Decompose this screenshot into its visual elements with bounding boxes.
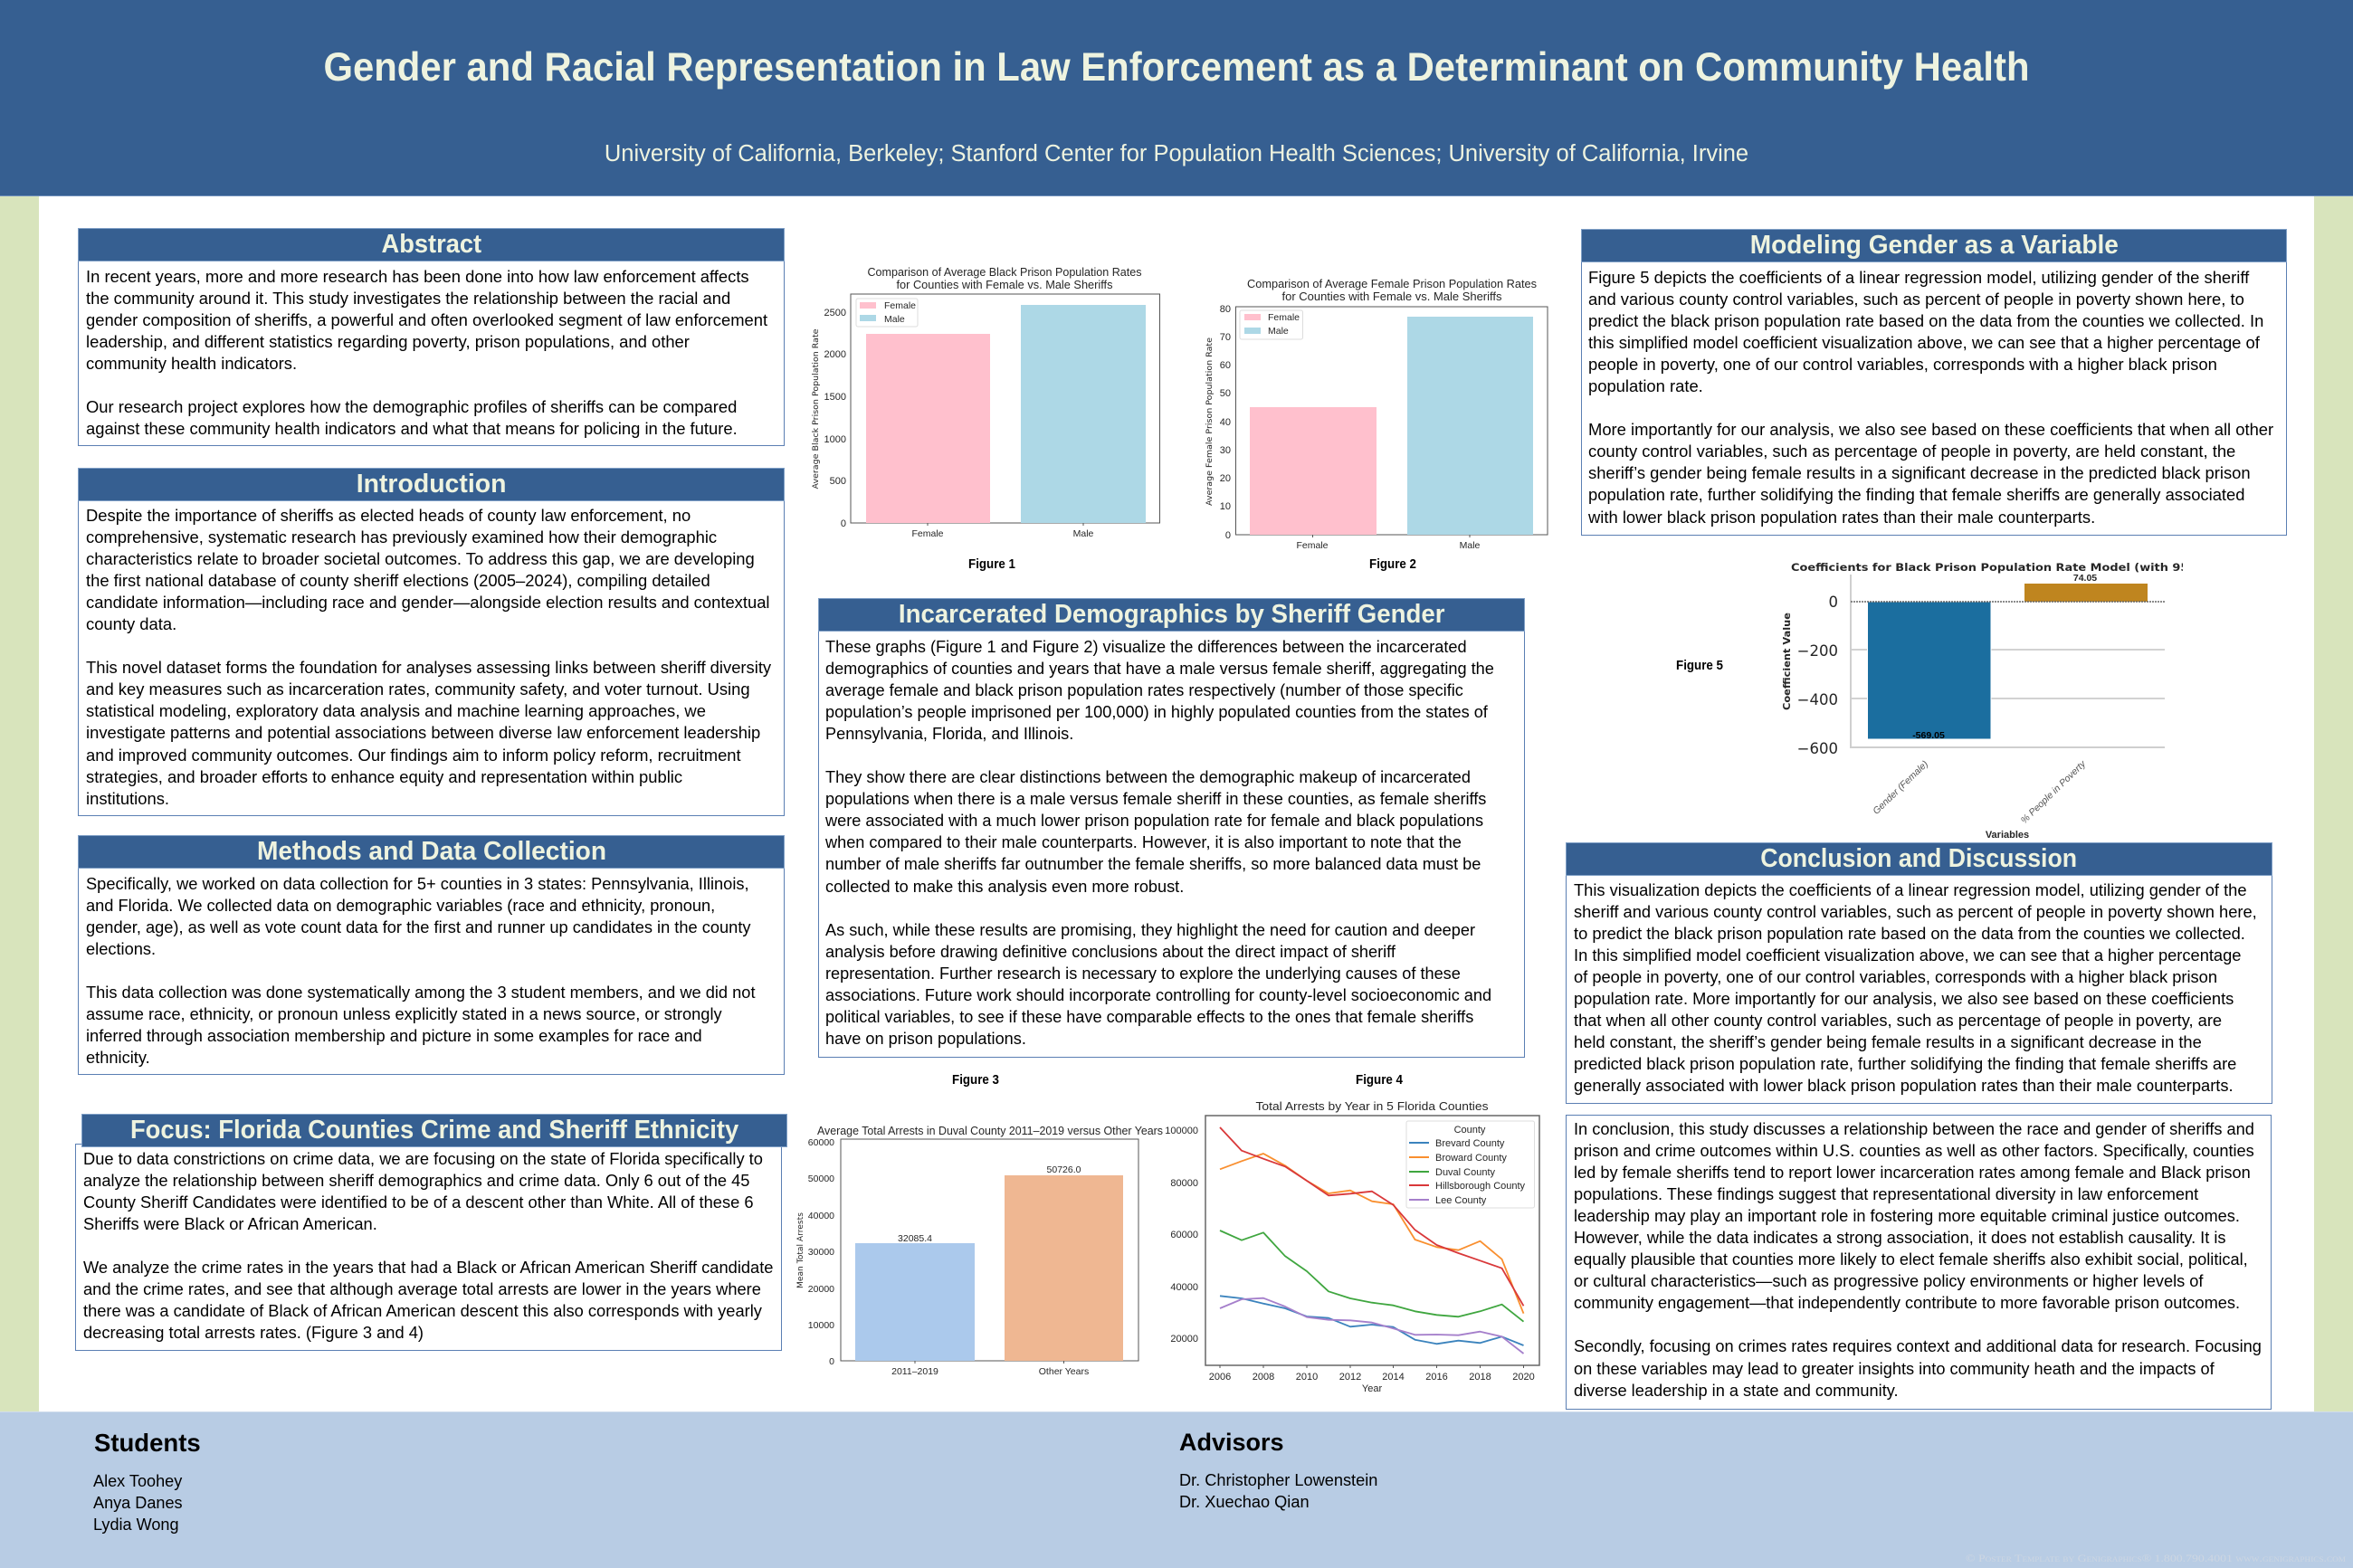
methods text: Specifically, we worked on data collection for 5+ counties in 3 states: Pennsylvania, Illinois, xyxy=(86,874,749,893)
title: Gender and Racial Representation in Law Enforcement as a Determinant on Community Health xyxy=(323,45,2030,90)
incarcerated text: Pennsylvania, Florida, and Illinois. xyxy=(825,725,1073,743)
conclusion text: to predict the black prison population rate based on the data from the counties we collected. xyxy=(1574,924,2245,943)
caption: figure 2: Figure 2 xyxy=(1369,557,1416,572)
chart: figure 4 line chart: 40000 xyxy=(1170,1282,1198,1293)
chart: figure 1 bar chart: 2500 xyxy=(824,308,846,318)
students names: Anya Danes xyxy=(93,1494,183,1512)
conclusion paragraph: diverse leadership in a state and community. xyxy=(1574,1382,1899,1400)
chart: figure 2 bar chart: Comparison of Average Female Prison Population Rates xyxy=(1247,278,1537,290)
incarcerated text: analysis before drawing definitive conclusions about the direct impact of sheriff xyxy=(825,943,1396,961)
chart: figure 4 line chart xyxy=(1165,1099,1540,1394)
line: Lee County xyxy=(1220,1298,1524,1354)
modeling heading xyxy=(1581,229,2287,262)
chart: figure 5 coefficient bars: Gender (Female) xyxy=(1871,759,1930,817)
modeling text: sheriff’s gender being female results in a significant decrease in the predicted black prison xyxy=(1588,463,2251,482)
abstract text: against these community health indicators and what that means for policing in the future. xyxy=(86,419,738,438)
chart: figure 3 bar chart: 50726.0 xyxy=(1047,1164,1081,1175)
abstract text: In recent years, more and more research has been done into how law enforcement affects xyxy=(86,267,749,286)
line: Brevard County xyxy=(1220,1296,1524,1345)
conclusion heading: Conclusion and Discussion xyxy=(1761,844,2077,873)
chart: figure 3 bar chart: 10000 xyxy=(808,1320,834,1331)
caption: figure 4: Figure 4 xyxy=(1356,1073,1403,1088)
chart: figure 2 bar chart: 70 xyxy=(1220,332,1231,343)
caption: figure 1: Figure 1 xyxy=(968,557,1015,572)
conclusion paragraph: However, while the data indicates a strong association, it does not establish causality. It is xyxy=(1574,1229,2225,1247)
focus text: and the crime rates, and see that although average total arrests are lower in the years where xyxy=(83,1279,761,1298)
incarcerated heading xyxy=(818,598,1525,632)
template credit: © Poster Template by Genigraphics® 1.800.790.4001 www.genigraphics.com xyxy=(1966,1552,2346,1564)
focus text: Due to data constrictions on crime data, we are focusing on the state of Florida specifically to xyxy=(83,1149,763,1168)
modeling text: population rate. xyxy=(1588,376,1703,395)
students names: Alex Toohey xyxy=(93,1472,182,1490)
chart: figure 1 bar chart: for Counties with Female vs. Male Sheriffs xyxy=(896,279,1113,291)
focus text: County Sheriff Candidates were identified to be of a descent other than White. All of these 6 xyxy=(83,1193,754,1212)
introduction heading xyxy=(78,468,785,501)
methods body xyxy=(78,862,785,1075)
chart: figure 3 bar chart: 32085.4 xyxy=(898,1233,932,1244)
conclusion text: that when all other county control variables, such as percentage of people in poverty, are xyxy=(1574,1011,2222,1030)
conclusion paragraph: prison and crime outcomes within U.S. counties as well as other factors. Specifically, counties xyxy=(1574,1142,2254,1160)
chart: figure 4 line chart: 2012 xyxy=(1339,1372,1361,1383)
chart: figure 4 line chart: 2008 xyxy=(1253,1372,1274,1383)
caption: figure 5: Figure 5 xyxy=(1676,659,1723,673)
conclusion text: population rate. More importantly for our analysis, we also see based on these coefficients xyxy=(1574,989,2234,1008)
introduction text: institutions. xyxy=(86,789,169,808)
introduction text: the first national database of county sheriff elections (2005–2024), compiling detailed xyxy=(86,571,710,590)
chart: figure 5 coefficient bars: 74.05 xyxy=(2073,573,2097,584)
chart: figure 2 bar chart: 10 xyxy=(1220,501,1231,512)
chart: figure 1 bar chart: Female xyxy=(884,300,916,311)
incarcerated heading: Incarcerated Demographics by Sheriff Gender xyxy=(899,600,1444,629)
legend: counties: Broward County xyxy=(1435,1153,1507,1164)
modeling text: population rate, further solidifying the finding that female sheriffs are generally associated xyxy=(1588,485,2244,504)
chart: figure 4 line chart: 2014 xyxy=(1382,1372,1405,1383)
chart: figure 2 bar chart: 0 xyxy=(1225,530,1231,541)
incarcerated text: were associated with a much lower prison population rate for female and black populations xyxy=(825,812,1483,830)
line: Broward County xyxy=(1220,1154,1524,1314)
advisors names xyxy=(1179,1471,1377,1511)
chart: figure 1 bar chart: Male xyxy=(1073,528,1094,539)
advisors names: Dr. Xuechao Qian xyxy=(1179,1493,1310,1511)
advisors names: Dr. Christopher Lowenstein xyxy=(1179,1471,1377,1489)
panel: methods xyxy=(78,835,785,1075)
focus text xyxy=(83,1149,773,1342)
chart: figure 2 bar chart: Female xyxy=(1296,540,1329,551)
conclusion paragraph: leadership may play an important role in fostering more equitable criminal justice outcomes. xyxy=(1574,1207,2240,1225)
incarcerated text: representation. Further research is necessary to explore the underlying causes of these xyxy=(825,965,1461,983)
conclusion text: This visualization depicts the coefficients of a linear regression model, utilizing gender of the xyxy=(1574,880,2247,899)
panel: abstract xyxy=(78,228,785,446)
banner xyxy=(0,0,2353,196)
chart: figure 4 line chart: 2010 xyxy=(1296,1372,1318,1383)
panel: conclusion and discussion xyxy=(1566,842,2272,1104)
chart: figure 5 coefficient bars: Coefficients for Black Prison Population Rate Model (with 95% CI) xyxy=(1791,561,2183,574)
incarcerated text: number of male sheriffs far outnumber the female sheriffs, so more balanced data must be xyxy=(825,855,1481,873)
methods heading xyxy=(78,835,785,869)
chart: figure 3 bar chart: Average Total Arrests in Duval County 2011–2019 versus Other Years xyxy=(817,1125,1163,1137)
chart: figure 3 bar chart: 2011–2019 xyxy=(891,1366,938,1377)
methods text: gender, age), as well as vote count data for the first and runner up candidates in the county xyxy=(86,917,751,936)
chart: figure 2 bar chart: for Counties with Female vs. Male Sheriffs xyxy=(1281,290,1502,303)
incarcerated text: These graphs (Figure 1 and Figure 2) visualize the differences between the incarcerated xyxy=(825,638,1467,656)
incarcerated text: collected to make this analysis even more robust. xyxy=(825,878,1184,896)
chart: figure 5 coefficient bars xyxy=(1782,561,2183,841)
right sidebar xyxy=(2314,195,2353,1411)
incarcerated text: population’s people imprisoned per 100,000) in highly populated counties from the states of xyxy=(825,703,1488,721)
students names: Lydia Wong xyxy=(93,1516,179,1534)
abstract body xyxy=(78,255,785,446)
conclusion text: of people in poverty, one of our control variables, corresponds with a higher black prison xyxy=(1574,967,2217,986)
introduction text: Despite the importance of sheriffs as elected heads of county law enforcement, no xyxy=(86,506,691,525)
introduction text: comprehensive, systematic research has previously examined how their demographic xyxy=(86,527,717,546)
abstract text xyxy=(86,267,767,438)
chart: figure 3 bar chart: 40000 xyxy=(808,1211,834,1221)
chart: figure 1 bar chart: Male xyxy=(884,314,905,325)
abstract text: Our research project explores how the demographic profiles of sheriffs can be compared xyxy=(86,397,737,416)
methods text: elections. xyxy=(86,939,156,958)
chart: figure 2 bar chart: 80 xyxy=(1220,304,1231,315)
line: Duval County xyxy=(1220,1231,1524,1322)
conclusion paragraph: or cultural characteristics—such as progressive policy environments or higher levels of xyxy=(1574,1272,2203,1290)
chart: figure 5 coefficient bars: % People in Poverty xyxy=(2019,758,2089,826)
chart: figure 1 bar chart: Comparison of Average Black Prison Population Rates xyxy=(867,266,1142,279)
chart: figure 4 line chart: 100000 xyxy=(1165,1126,1198,1136)
line: Hillsborough County xyxy=(1220,1127,1524,1306)
students heading: Students xyxy=(94,1429,201,1457)
conclusion text: sheriff and various county control variables, such as percent of people in poverty shown here, xyxy=(1574,902,2257,921)
focus text: decreasing total arrests rates. (Figure 3 and 4) xyxy=(83,1323,424,1342)
chart: figure 2 bar chart: 30 xyxy=(1220,445,1231,456)
footer xyxy=(0,1411,2353,1568)
introduction text: statistical modeling, exploratory data analysis and machine learning approaches, we xyxy=(86,701,706,720)
legend: counties xyxy=(1406,1121,1535,1208)
chart: figure 2 bar chart: Average Female Prison Population Rate xyxy=(1205,337,1215,506)
chart: figure 3 bar chart: 50000 xyxy=(808,1174,834,1184)
modeling text: Figure 5 depicts the coefficients of a linear regression model, utilizing gender of the sheriff xyxy=(1588,268,2249,287)
advisors heading: Advisors xyxy=(1179,1429,1284,1456)
panel: incarcerated demographics xyxy=(818,598,1525,1058)
legend: counties: County xyxy=(1454,1125,1486,1136)
chart: figure 5 coefficient bars: Coefficient Value xyxy=(1782,613,1793,710)
modeling body xyxy=(1581,256,2287,536)
conclusion paragraph xyxy=(1574,1120,2262,1400)
chart: figure 4 line chart: 20000 xyxy=(1170,1334,1198,1345)
introduction text: candidate information—including race and gender—alongside election results and contextual xyxy=(86,593,770,612)
chart: figure 2 bar chart: 20 xyxy=(1220,473,1231,484)
introduction text: characteristics relate to broader societal outcomes. To address this gap, we are developing xyxy=(86,549,755,568)
introduction text: strategies, and broader efforts to enhance equity and representation within public xyxy=(86,767,682,786)
conclusion paragraph: equally plausible that counties more likely to elect female sheriffs also exhibit social, political, xyxy=(1574,1250,2248,1269)
chart: figure 1 bar chart: 2000 xyxy=(824,349,846,360)
methods text: assume race, ethnicity, or pronoun unless explicitly stated in a news source, or strongly xyxy=(86,1004,722,1023)
chart: figure 2 bar chart: 60 xyxy=(1220,360,1231,371)
abstract text: community health indicators. xyxy=(86,354,297,373)
chart: figure 3 bar chart: Mean Total Arrests xyxy=(796,1212,805,1288)
caption: figure 3: Figure 3 xyxy=(952,1073,999,1088)
focus text: analyze the relationship between sheriff demographics and crime data. Only 6 out of the 45 xyxy=(83,1171,749,1190)
introduction heading: Introduction xyxy=(357,470,506,499)
chart: figure 5 coefficient bars: −600 xyxy=(1797,740,1838,757)
chart: figure 3 bar chart: 60000 xyxy=(808,1137,834,1148)
incarcerated text: have on prison populations. xyxy=(825,1030,1026,1048)
chart: figure 2 bar chart: Male xyxy=(1268,326,1289,337)
methods heading: Methods and Data Collection xyxy=(256,837,606,866)
modeling text: More importantly for our analysis, we also see based on these coefficients that when all other xyxy=(1588,420,2273,439)
chart: figure 4 line chart: Year xyxy=(1362,1383,1382,1394)
focus text: Sheriffs were Black or African American. xyxy=(83,1214,377,1233)
incarcerated body xyxy=(818,625,1525,1058)
abstract text: the community around it. This study investigates the relationship between the racial and xyxy=(86,289,730,308)
incarcerated text: demographics of counties and years that have a male versus female sheriff, aggregating the xyxy=(825,660,1494,678)
introduction text: and key measures such as incarceration rates, community safety, and voter turnout. Using xyxy=(86,679,750,698)
introduction text: county data. xyxy=(86,614,176,633)
chart: figure 4 line chart: 60000 xyxy=(1170,1230,1198,1240)
introduction text: This novel dataset forms the foundation for analyses assessing links between sheriff diversity xyxy=(86,658,771,677)
methods text: and Florida. We collected data on demographic variables (race and ethnicity, pronoun, xyxy=(86,896,715,915)
incarcerated text: average female and black prison population rates respectively (number of those specific xyxy=(825,681,1463,699)
conclusion text: predicted black prison population rate, further solidifying the finding that female sheriffs are xyxy=(1574,1054,2236,1073)
introduction text: investigate patterns and potential associations between diverse law enforcement leadership xyxy=(86,723,760,742)
introduction text: and improved community outcomes. Our findings aim to inform policy reform, recruitment xyxy=(86,746,741,765)
incarcerated text: As such, while these results are promising, they highlight the need for caution and deeper xyxy=(825,921,1475,939)
chart: figure 5 coefficient bars: −400 xyxy=(1797,691,1838,708)
conclusion paragraph: In conclusion, this study discusses a relationship between the race and gender of sheriffs and xyxy=(1574,1120,2254,1138)
chart: figure 4 line chart: 2020 xyxy=(1512,1372,1535,1383)
abstract heading: Abstract xyxy=(381,230,481,259)
affiliations: University of California, Berkeley; Stanford Center for Population Health Sciences; University of California, Irvine xyxy=(605,141,1748,166)
modeling text: with lower black prison population rates than their male counterparts. xyxy=(1588,508,2095,527)
conclusion paragraph: populations. These findings suggest that representational diversity in law enforcement xyxy=(1574,1185,2198,1203)
chart: figure 2 bar chart xyxy=(1205,278,1548,551)
chart: figure 5 coefficient bars: Variables xyxy=(1986,830,2029,841)
conclusion heading xyxy=(1566,842,2272,876)
chart: figure 5 coefficient bars: 0 xyxy=(1828,594,1838,611)
chart: figure 1 bar chart: 1500 xyxy=(824,392,846,403)
chart: figure 5 coefficient bars: −200 xyxy=(1797,642,1838,660)
modeling text: people in poverty, one of our control variables, corresponds with a higher black prison xyxy=(1588,355,2217,374)
chart: figure 1 bar chart: Average Black Prison Population Rate xyxy=(812,328,821,489)
chart: figure 2 bar chart: Female xyxy=(1268,312,1300,323)
conclusion paragraph: led by female sheriffs tend to report lower incarceration rates among female and Black prison xyxy=(1574,1164,2251,1182)
abstract text: gender composition of sheriffs, a powerful and often overlooked segment of law enforcement xyxy=(86,310,767,329)
modeling text: this simplified model coefficient visualization above, we can see that a higher percentage of xyxy=(1588,333,2260,352)
chart: figure 1 bar chart: 500 xyxy=(830,476,846,487)
legend: counties: Hillsborough County xyxy=(1435,1181,1526,1192)
students names xyxy=(93,1472,183,1534)
chart: figure 4 line chart: 80000 xyxy=(1170,1178,1198,1189)
incarcerated text xyxy=(825,638,1494,1048)
legend: counties: Duval County xyxy=(1435,1167,1496,1178)
chart: figure 2 bar chart: 50 xyxy=(1220,388,1231,399)
chart: figure 3 bar chart: Other Years xyxy=(1039,1366,1089,1377)
panel: focus xyxy=(75,1114,787,1351)
modeling text xyxy=(1588,268,2273,527)
introduction text xyxy=(86,506,771,808)
left sidebar xyxy=(0,195,39,1411)
focus text: We analyze the crime rates in the years that had a Black or African American Sheriff candidate xyxy=(83,1258,773,1277)
chart: figure 4 line chart: 2006 xyxy=(1209,1372,1231,1383)
methods text: ethnicity. xyxy=(86,1048,150,1067)
chart: figure 3 bar chart: 0 xyxy=(829,1356,834,1367)
conclusion text: held constant, the sheriff’s gender being female results in a significant decrease in the xyxy=(1574,1032,2202,1051)
methods text: inferred through association membership and picture in some examples for race and xyxy=(86,1026,702,1045)
incarcerated text: when compared to their male counterparts. However, it is also important to note that the xyxy=(825,833,1462,851)
chart: figure 3 bar chart xyxy=(796,1125,1163,1377)
legend: counties: Brevard County xyxy=(1435,1138,1505,1149)
incarcerated text: associations. Future work should incorporate controlling for county-level socioeconomic and xyxy=(825,986,1491,1004)
abstract text: leadership, and different statistics regarding poverty, prison populations, and other xyxy=(86,332,690,351)
abstract heading xyxy=(78,228,785,261)
chart: figure 2 bar chart: Male xyxy=(1460,540,1481,551)
incarcerated text: political variables, to see if these have comparable effects to the ones that female sheriffs xyxy=(825,1008,1473,1026)
chart: figure 1 bar chart: 0 xyxy=(841,518,846,529)
modeling text: and various county control variables, such as percent of people in poverty shown here, to xyxy=(1588,290,2244,309)
chart: figure 3 bar chart: 30000 xyxy=(808,1247,834,1258)
introduction body xyxy=(78,495,785,816)
chart: figure 1 bar chart xyxy=(812,266,1160,539)
conclusion text: generally associated with lower black prison population rates than their male counterparts. xyxy=(1574,1076,2234,1095)
modeling text: county control variables, such as percentage of people in poverty, are held constant, the xyxy=(1588,442,2235,461)
methods text xyxy=(86,874,756,1067)
focus body xyxy=(75,1144,782,1351)
chart: figure 5 coefficient bars: -569.05 xyxy=(1912,730,1945,741)
conclusion text: In this simplified model coefficient visualization above, we can see that a higher percentage xyxy=(1574,946,2241,965)
conclusion text xyxy=(1574,880,2257,1095)
chart: figure 4 line chart: 2016 xyxy=(1425,1372,1448,1383)
legend: counties: Lee County xyxy=(1435,1195,1487,1206)
panel: modeling gender xyxy=(1581,229,2287,536)
conclusion paragraph: community engagement—that independently contribute to more favorable prison outcomes. xyxy=(1574,1294,2240,1312)
panel: introduction xyxy=(78,468,785,816)
conclusion paragraph: Secondly, focusing on crimes rates requires context and additional data for research. Focusing xyxy=(1574,1337,2262,1355)
chart: figure 4 line chart: Total Arrests by Year in 5 Florida Counties xyxy=(1256,1099,1489,1113)
conclusion paragraph: on these variables may lead to greater insights into community heath and the impacts of xyxy=(1574,1360,2215,1378)
panel: conclusion text xyxy=(1566,1115,2272,1410)
chart: figure 2 bar chart: 40 xyxy=(1220,417,1231,428)
conclusion body xyxy=(1566,870,2272,1104)
chart: figure 4 line chart: 2018 xyxy=(1469,1372,1491,1383)
focus text: there was a candidate of Black of African American descent this also corresponds with yearly xyxy=(83,1301,762,1320)
methods text: This data collection was done systematically among the 3 student members, and we did not xyxy=(86,983,756,1002)
chart: figure 1 bar chart: 1000 xyxy=(824,434,846,445)
focus heading: Focus: Florida Counties Crime and Sheriff Ethnicity xyxy=(130,1116,738,1145)
chart: figure 3 bar chart: 20000 xyxy=(808,1284,834,1295)
incarcerated text: populations when there is a male versus female sheriff in these counties, as female sheriffs xyxy=(825,790,1486,808)
incarcerated text: They show there are clear distinctions between the demographic makeup of incarcerated xyxy=(825,768,1471,786)
modeling text: predict the black prison population rate based on the data from the counties we collected. In xyxy=(1588,311,2263,330)
chart: figure 1 bar chart: Female xyxy=(911,528,944,539)
modeling heading: Modeling Gender as a Variable xyxy=(1749,231,2119,260)
